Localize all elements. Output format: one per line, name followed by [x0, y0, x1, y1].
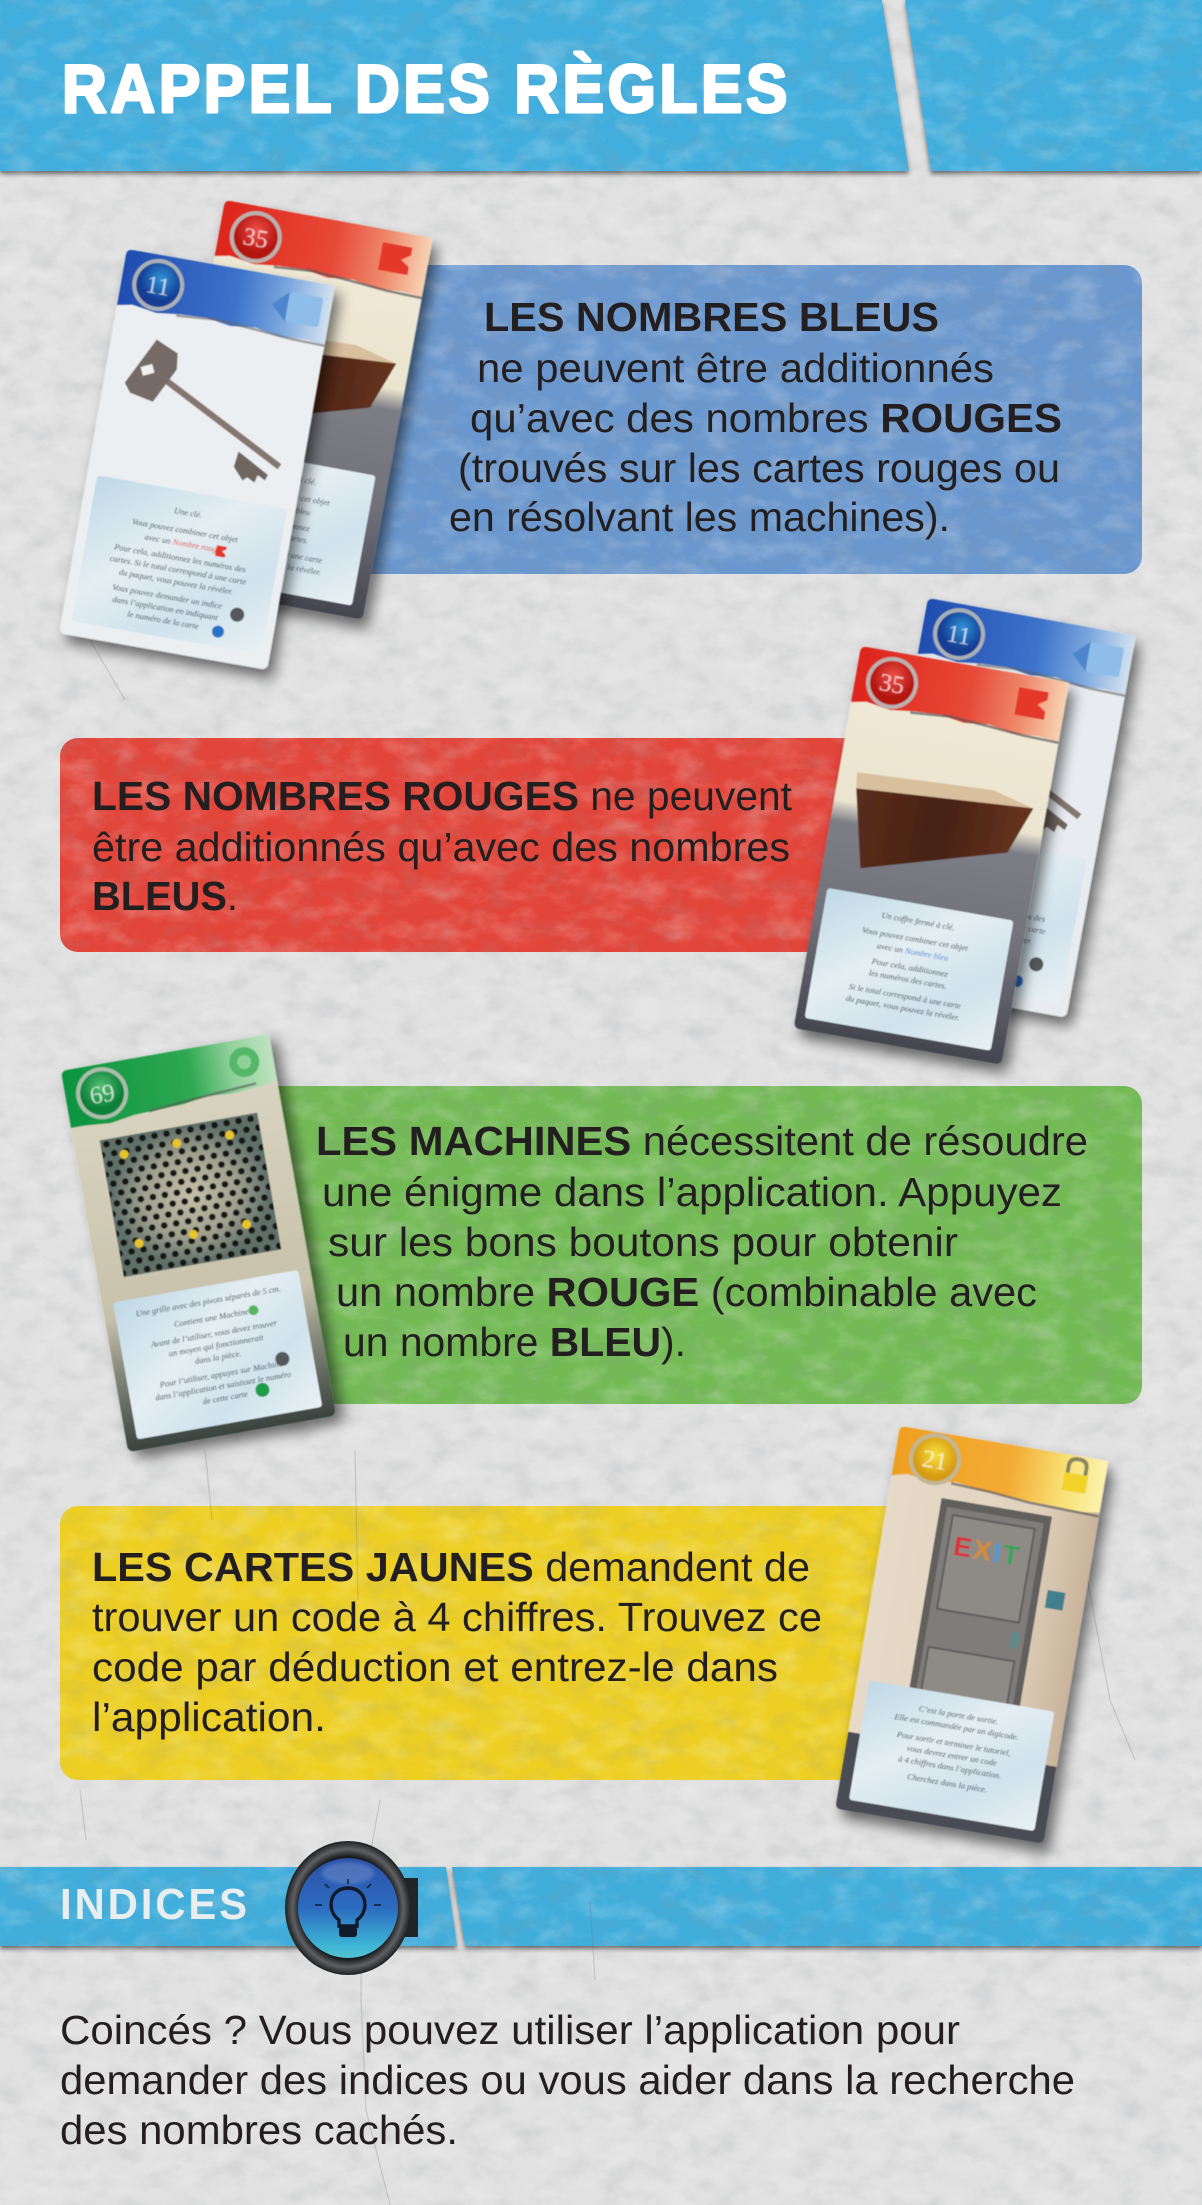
heading: indices: INDICES: [60, 1880, 250, 1929]
text: machines: un nombre ROUGE (combinable avec: [336, 1269, 1037, 1315]
card: blue 11 front: 11: [144, 271, 172, 302]
card: blue 11 back: [859, 598, 1136, 1017]
card: red 35 back: Vous pouvez combiner cet objet: [223, 479, 331, 508]
card: green 69: Pour l’utiliser, appuyez sur Machine: [158, 1358, 283, 1390]
card: yellow 21: vous devrez entrer un code: [906, 1743, 998, 1768]
card: yellow 21: C’est la porte de sortie.: [918, 1703, 999, 1726]
card: yellow 21: 21: [920, 1445, 949, 1476]
text: yellow cards: l’application.: [92, 1694, 326, 1740]
text: red numbers: [92, 773, 793, 919]
text: red numbers: être additionnés qu’avec des nombres: [92, 824, 790, 870]
card: red 35 front: Vous pouvez combiner cet objet: [861, 925, 969, 953]
card: blue 11 front: Pour cela, additionnez les numéros des: [113, 541, 247, 575]
panel: red numbers: [60, 738, 880, 952]
text: indices body: [60, 2007, 1075, 2153]
text: blue numbers: en résolvant les machines).: [449, 494, 950, 540]
card: red 35 back: Pour cela, additionnez: [232, 510, 311, 534]
card: green 69: dans l’application et saisissez le numéro: [154, 1369, 292, 1403]
title: RAPPEL DES RÈGLES: [62, 51, 791, 127]
card: blue 11 front: le numéro de la carte: [127, 609, 200, 631]
panel: blue numbers: [340, 265, 1142, 574]
card: red 35 back: du paquet, vous pouvez la révéler.: [207, 547, 322, 577]
card: red 35 back: Si le total correspond à une carte: [210, 535, 323, 565]
card: red 35 front: Pour cela, additionnez: [870, 956, 949, 979]
card: blue 11 back: 11: [945, 620, 973, 651]
card: blue 11 front: Une clé.: [173, 505, 203, 520]
card: green 69: [61, 1034, 336, 1452]
text: machines: LES MACHINES nécessitent de résoudre: [316, 1118, 1088, 1164]
card: yellow 21: à 4 chiffres dans l’application.: [898, 1753, 1002, 1781]
card: red 35 front: avec un Nombre bleu: [876, 940, 949, 963]
card: blue 11 front: avec un Nombre rouge: [144, 532, 222, 555]
text: red numbers: BLEUS.: [92, 873, 238, 919]
text: blue numbers: (trouvés sur les cartes rouges ou: [458, 445, 1060, 491]
card: green 69: 69: [88, 1079, 117, 1110]
text: red numbers: LES NOMBRES ROUGES ne peuvent: [92, 773, 793, 819]
text: indices body: demander des indices ou vous aider dans la recherche: [60, 2057, 1075, 2103]
card: blue 11 front: Vous pouvez demander un indice: [112, 582, 223, 611]
card: blue 11 back: cartes. Si le total correspond à une carte: [908, 902, 1047, 936]
card: red 35 back: [155, 200, 433, 620]
card: red 35 front: 35: [877, 669, 906, 700]
text: machines: [316, 1118, 1088, 1365]
text: blue numbers: [449, 294, 1062, 540]
panel: yellow cards: [60, 1506, 920, 1780]
card: red 35 back: Un coffre fermé à clé.: [243, 464, 317, 487]
text: blue numbers: LES NOMBRES BLEUS: [484, 294, 939, 340]
card: yellow 21: Elle est commandée par un digicode.: [893, 1711, 1020, 1742]
card: blue 11 front: [59, 249, 335, 670]
text: indices body: des nombres cachés.: [60, 2107, 458, 2153]
card: yellow 21: Pour sortir et terminer le tutoriel,: [895, 1729, 1011, 1758]
card: blue 11 front: Vous pouvez combiner cet objet: [131, 516, 239, 545]
text: yellow cards: LES CARTES JAUNES demandent de: [92, 1544, 810, 1590]
text: yellow cards: [92, 1544, 822, 1740]
text: machines: une énigme dans l’application. Appuyez: [322, 1169, 1062, 1215]
card: red 35 front: les numéros des cartes.: [868, 967, 948, 991]
card: blue 11 back: Pour cela, additionnez les numéros des: [912, 890, 1047, 924]
text: machines: un nombre BLEU).: [343, 1319, 686, 1365]
card: red 35 front: Si le total correspond à une carte: [848, 981, 962, 1011]
text: machines: sur les bons boutons pour obtenir: [328, 1219, 958, 1265]
text: indices body: Coincés ? Vous pouvez utiliser l’application pour: [60, 2007, 960, 2053]
card: green 69: Avant de l’utiliser, vous devez trouver: [149, 1317, 278, 1350]
card: blue 11 back: du paquet, vous pouvez la révéler.: [918, 916, 1033, 946]
panel: machines: [240, 1086, 1142, 1404]
icon: light bulb badge: [285, 1841, 418, 1975]
card: red 35 front: du paquet, vous pouvez la révéler.: [845, 993, 961, 1023]
card: blue 11 front: du paquet, vous pouvez la révéler.: [118, 567, 234, 597]
card: blue 11 front: cartes. Si le total correspond à une carte: [109, 553, 247, 587]
card: red 35 front: [794, 646, 1069, 1065]
card: red 35 front: Un coffre fermé à clé.: [881, 910, 955, 932]
card: green 69: Contient une Machine: [173, 1306, 249, 1329]
header band: [0, 0, 1202, 171]
text: blue numbers: ne peuvent être additionnés: [477, 345, 994, 391]
card: yellow 21: [835, 1426, 1108, 1844]
card: blue 11 front: dans l’application en indiquant: [112, 594, 219, 622]
indices band: [0, 1867, 1202, 1946]
card: yellow 21: EXIT: [951, 1531, 1023, 1572]
card: green 69: dans la pièce.: [194, 1348, 242, 1366]
card: red 35 back: les numéros des cartes.: [230, 521, 309, 546]
text: yellow cards: trouver un code à 4 chiffres. Trouvez ce: [92, 1594, 822, 1640]
card: red 35 back: avec un Nombre bleu: [238, 495, 311, 517]
text: blue numbers: qu’avec des nombres ROUGES: [470, 395, 1062, 441]
text: yellow cards: code par déduction et entrez-le dans: [92, 1644, 778, 1690]
card: green 69: un moyen qui fonctionnerait: [168, 1332, 265, 1359]
card: red 35 back: 35: [241, 223, 270, 254]
card: green 69: Une grille avec des pivots séparés de 5 cm.: [135, 1283, 281, 1319]
card: yellow 21: Cherchez dans la pièce.: [906, 1771, 988, 1795]
card: green 69: de cette carte: [202, 1389, 249, 1406]
